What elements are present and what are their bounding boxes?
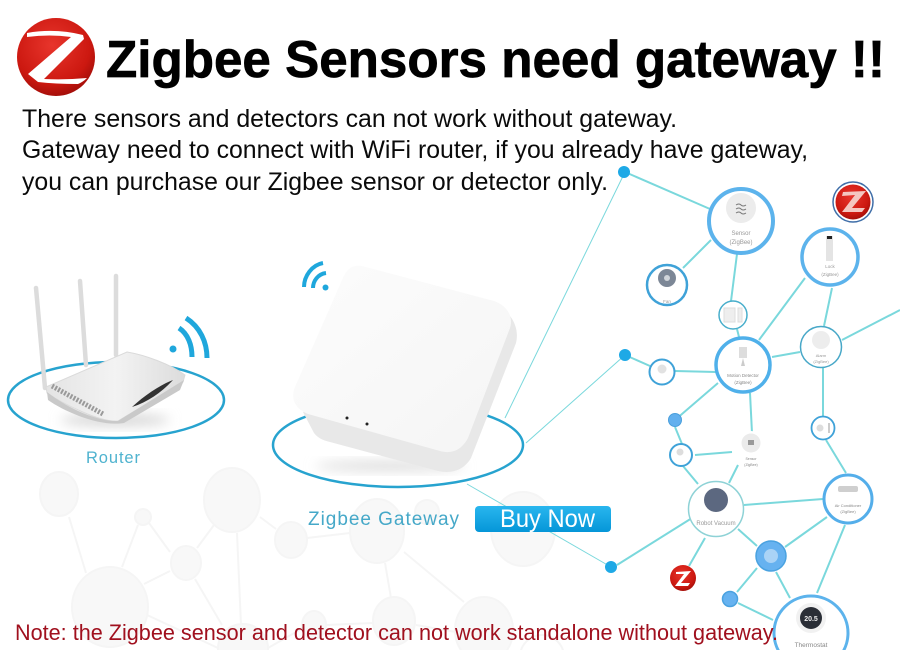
router antennas xyxy=(36,276,116,388)
node: robot vacuum: Robot Vacuum xyxy=(696,521,736,527)
wifi signal icon left xyxy=(304,263,328,290)
gateway xyxy=(273,263,523,487)
node: sensor: Sensor xyxy=(731,231,751,237)
node: robot vacuum xyxy=(688,482,744,536)
gateway shadow xyxy=(315,461,465,471)
node: sensor: (ZigBee) xyxy=(729,240,753,246)
network nodes xyxy=(605,166,873,650)
node: alarm: Alarm xyxy=(816,353,827,358)
connection dots xyxy=(605,166,631,573)
wifi signal icon right xyxy=(170,318,207,358)
node: air conditioner: Air Conditioner xyxy=(835,503,862,508)
node: sensor grey xyxy=(739,431,763,467)
node: lock: Lock xyxy=(825,264,835,269)
gateway base ellipse xyxy=(273,403,523,487)
red note: Note: the Zigbee sensor and detector can not work standalone without gateway. xyxy=(15,620,778,645)
node: fan xyxy=(647,265,687,305)
router body xyxy=(46,352,185,426)
zigbee logo xyxy=(17,18,95,96)
node: motion detector: Motion Detector xyxy=(727,373,759,378)
node: alarm: (ZigBee) xyxy=(813,359,829,364)
node: sensor xyxy=(709,189,773,253)
node: small sensor xyxy=(670,444,692,466)
router base ellipse xyxy=(8,362,224,438)
node: motion detector xyxy=(716,338,770,392)
node: fan: Fan xyxy=(663,299,671,304)
node: small light xyxy=(650,360,674,384)
router label: Router xyxy=(86,449,140,467)
description text: you can purchase our Zigbee sensor or detector only. xyxy=(22,168,608,196)
icon: zigbee badge top xyxy=(833,182,873,222)
node: small switch xyxy=(812,416,834,440)
description text xyxy=(22,105,808,196)
node: blue small xyxy=(722,592,738,606)
node: blue link dot xyxy=(668,414,682,426)
gateway device xyxy=(293,266,517,472)
node: sensor grey: (ZigBee) xyxy=(744,463,758,467)
node: door sensor xyxy=(719,301,747,329)
node: thermostat: Thermostat xyxy=(795,642,828,649)
buy now button: Buy Now xyxy=(500,505,596,533)
node: thermostat: 20.5 xyxy=(804,616,818,623)
node: lock: (ZigBee) xyxy=(821,272,839,277)
node: lock xyxy=(802,229,858,285)
network links xyxy=(467,172,900,620)
router xyxy=(8,276,224,438)
icon: zigbee badge bottom xyxy=(670,565,696,591)
node: air conditioner xyxy=(824,475,872,523)
background faint network xyxy=(40,468,564,650)
node: air conditioner: (ZigBee) xyxy=(840,509,856,514)
node: motion detector: (ZigBee) xyxy=(734,380,752,385)
gateway label: Zigbee Gateway xyxy=(308,509,460,530)
node: thermostat xyxy=(774,596,848,650)
node: sensor grey: Sensor xyxy=(745,457,757,461)
description text: There sensors and detectors can not work without gateway. xyxy=(22,105,677,133)
node: alarm xyxy=(800,326,842,368)
title: Zigbee Sensors need gateway !! xyxy=(106,31,885,89)
node: blue hub xyxy=(756,541,786,571)
description text: Gateway need to connect with WiFi router, if you already have gateway, xyxy=(22,136,808,164)
